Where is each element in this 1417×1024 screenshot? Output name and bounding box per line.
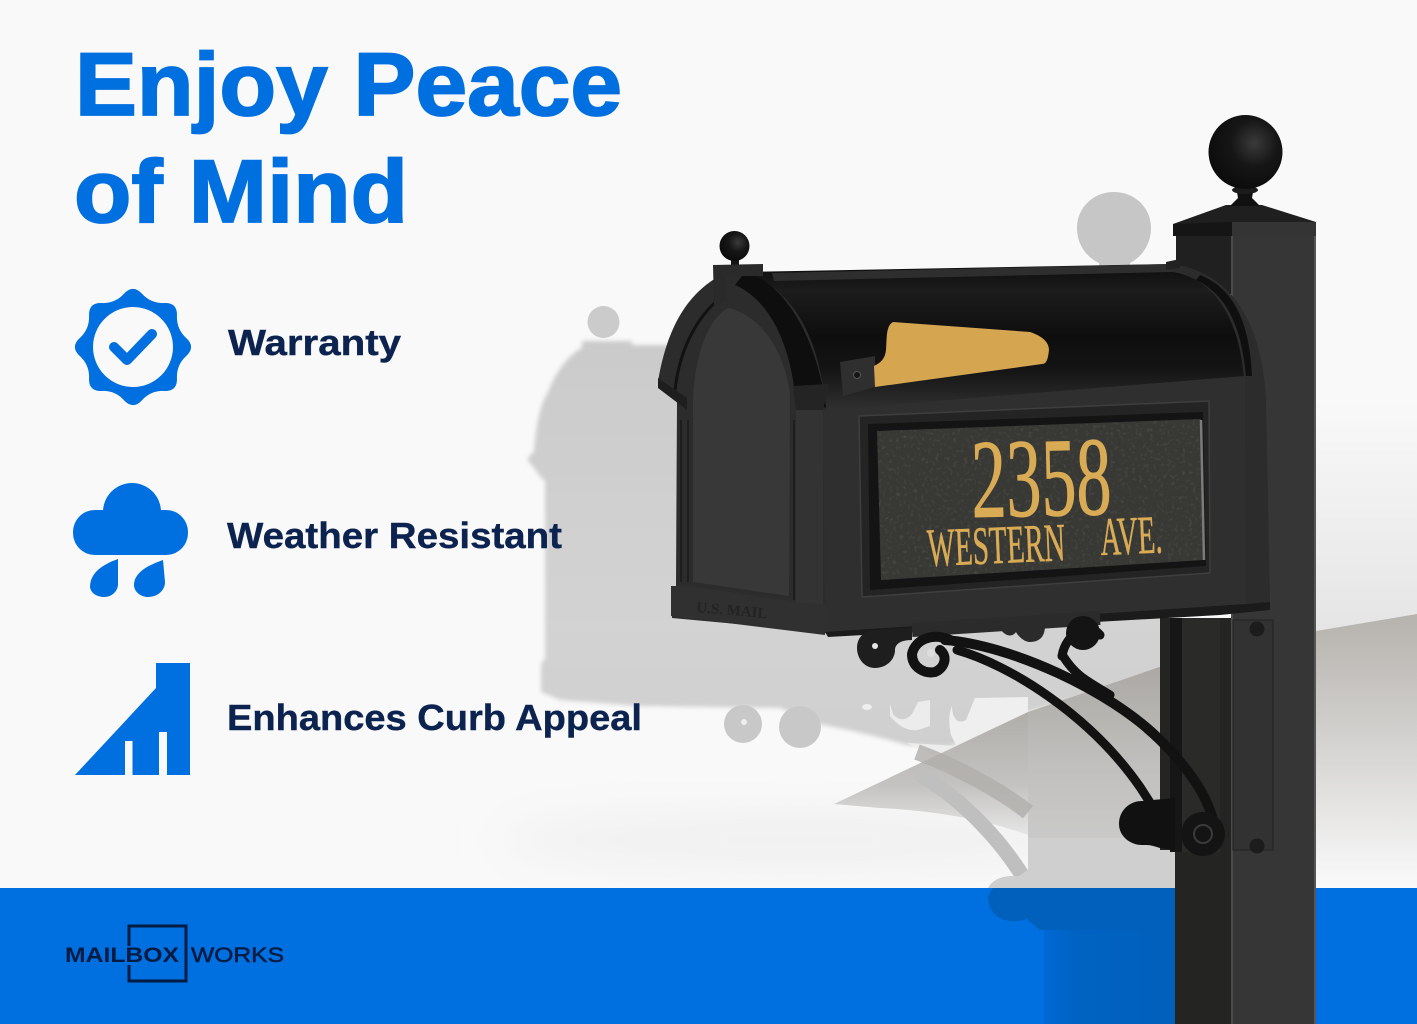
post: mounting plate <box>1233 620 1273 854</box>
mailbox: side base <box>671 586 825 635</box>
bracket: top scroll <box>1066 616 1100 650</box>
band left of vertical edge <box>834 712 1028 835</box>
shadow: post ball <box>1077 192 1151 272</box>
bracket: bottom scroll <box>1181 812 1225 856</box>
title: Enjoy Peace <box>75 34 622 134</box>
shadow of mailbox on wall <box>527 192 1165 756</box>
bracket: left scroll <box>912 637 950 672</box>
shadow: scroll discs <box>724 705 821 748</box>
mailbox: plaque street word: WESTERN <box>926 512 1066 578</box>
title: of Mind <box>74 141 408 241</box>
floor shadow haze <box>500 814 1100 866</box>
mailbox: dark arch strip <box>735 272 826 408</box>
bracket: rear scallops <box>1000 626 1045 642</box>
bracket: lower arc <box>957 650 1158 815</box>
icon: warranty badge <box>75 289 191 405</box>
post: lower left side <box>1160 618 1232 1024</box>
bracket: bottom cap <box>1119 798 1175 850</box>
post: corner highlight <box>1231 236 1233 1024</box>
bottom bar <box>0 888 1417 1024</box>
post: ball finial <box>1208 115 1282 206</box>
shadow over bottom bar <box>988 838 1178 1024</box>
mailbox: flag base <box>840 356 875 396</box>
mailbox: U.S. MAIL emboss: U.S. MAIL <box>696 600 768 622</box>
title <box>74 34 622 241</box>
bracket: disc hole <box>872 643 878 649</box>
mailbox: gold flag <box>874 322 1049 387</box>
mailbox: rear roof clip <box>1166 259 1180 270</box>
band right of post <box>1316 614 1417 888</box>
mailbox: side dome <box>658 272 832 632</box>
label: weather resistant: Weather Resistant <box>227 515 562 556</box>
mailbox: plaque house number: 2358 <box>970 415 1112 542</box>
mailbox: plaque street abbreviation: AVE. <box>1099 504 1163 567</box>
upper right wall tone <box>1316 400 1417 640</box>
mailbox: front face <box>823 376 1246 633</box>
logo: mailbox works <box>65 926 284 981</box>
logo: mailbox works: MAILBOX <box>65 944 179 967</box>
post: cap <box>1173 205 1316 236</box>
icon: rain cloud <box>73 483 188 597</box>
label: enhances curb appeal: Enhances Curb Appeal <box>227 697 642 738</box>
shadow: ball finial <box>588 306 620 338</box>
shadow: light ornament small dot <box>862 704 872 710</box>
logo: mailbox works: WORKS <box>191 944 284 967</box>
wall and ground band <box>834 614 1417 888</box>
shadow: mailbox body and plate <box>527 341 1165 747</box>
mailbox: roof rim line <box>772 264 1172 281</box>
mailbox: plaque texture panel <box>877 419 1204 580</box>
bracket: top rail <box>912 618 1100 630</box>
bracket: disc <box>857 628 912 668</box>
mailbox: plaque frame <box>859 401 1210 597</box>
bracket <box>857 616 1225 856</box>
bracket: upper arc <box>945 640 1216 835</box>
shadow: light ornament first hook <box>890 700 930 730</box>
mailbox: side ledge <box>658 378 687 410</box>
mailbox <box>658 231 1270 637</box>
bracket shadow arcs <box>917 752 1028 888</box>
mailbox: small finial <box>713 231 763 306</box>
post: lower dark channel <box>1170 618 1182 852</box>
mailbox: corner molding <box>793 384 829 410</box>
mailbox: right rim <box>1172 264 1270 606</box>
mailbox: corner post <box>796 410 823 610</box>
post: back side upper <box>1176 234 1234 294</box>
label: warranty: Warranty <box>228 322 401 363</box>
bracket: stem <box>1062 629 1110 695</box>
mailbox: roof <box>745 264 1246 410</box>
post <box>1160 115 1316 1024</box>
mailbox: side panel <box>693 308 790 596</box>
shadow: light ornament block <box>949 697 1028 745</box>
post: front face <box>1232 236 1316 1024</box>
band right of vertical edge <box>1028 660 1180 888</box>
shadow: white sliver <box>907 743 955 756</box>
icon: rising chart arrow <box>75 663 190 776</box>
